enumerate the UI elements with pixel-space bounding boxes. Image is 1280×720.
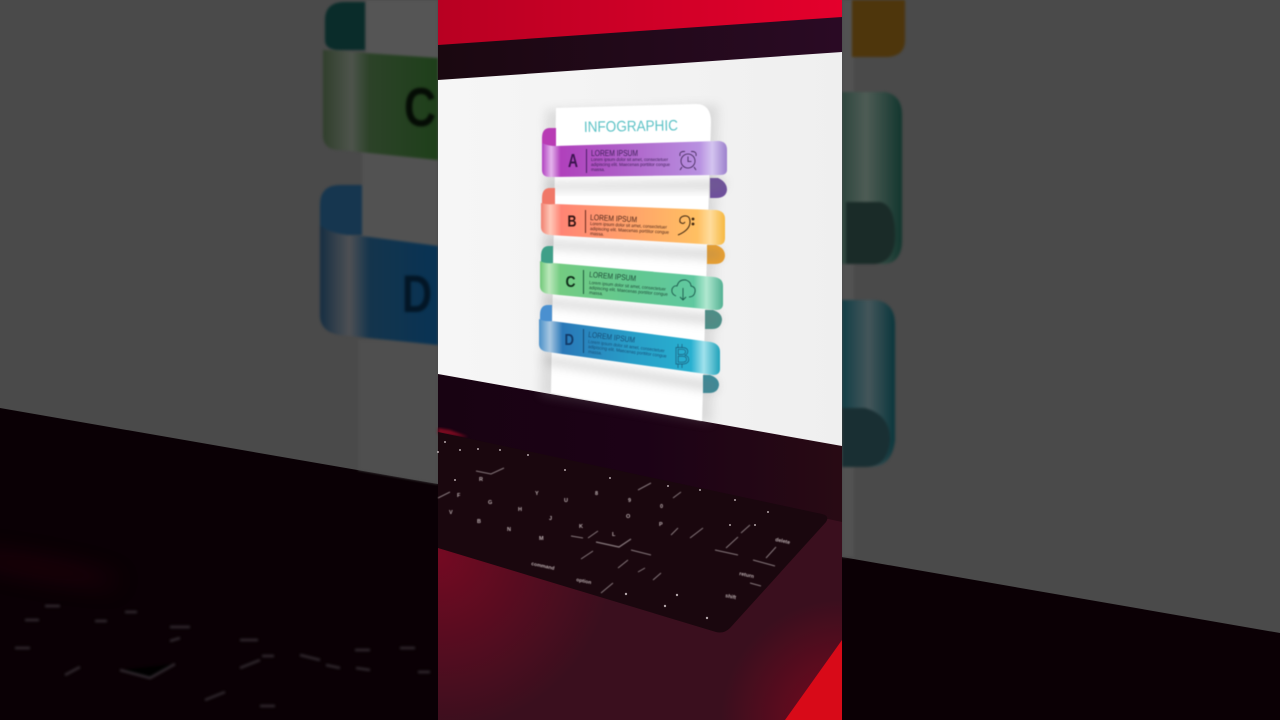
text B: massa. [590, 231, 604, 237]
paper shadow [540, 105, 718, 424]
key labels: delete [775, 537, 791, 546]
key labels: L [612, 532, 616, 538]
text C [589, 270, 668, 297]
key labels: G [488, 500, 492, 506]
text C: LOREM IPSUM [589, 270, 637, 283]
key labels: K [579, 524, 583, 530]
key labels: 0 [660, 504, 663, 510]
infographic [539, 104, 727, 424]
text D [588, 330, 667, 359]
text B: Lorem ipsum dolor sit amet, consectetuer [590, 221, 668, 230]
key labels: Y [535, 491, 539, 497]
key labels: N [507, 527, 511, 533]
text A [591, 149, 670, 172]
key labels: return [739, 571, 755, 580]
ribbon D [539, 305, 720, 393]
title: INFOGRAPHIC [584, 117, 678, 136]
text D: LOREM IPSUM [588, 330, 636, 345]
laptop lid top, red background [438, 0, 842, 60]
icon: bitcoin: B [674, 343, 690, 370]
key labels: P [659, 522, 663, 528]
text A: massa. [591, 167, 605, 172]
blurred letter C: C [404, 76, 436, 138]
letter B: B [568, 214, 576, 230]
text B [590, 213, 670, 237]
text D: adipiscing elit. Maecenas porttitor congue [588, 344, 667, 359]
text C: adipiscing elit. Maecenas porttitor congue [589, 285, 668, 297]
letter C: C [566, 274, 576, 291]
key labels: H [518, 507, 522, 513]
key labels: J [549, 516, 552, 522]
text D: massa. [588, 349, 602, 356]
key labels: B [477, 519, 481, 525]
key labels: M [539, 536, 544, 542]
right blurred side panel [842, 0, 1280, 720]
text C: Lorem ipsum dolor sit amet, consectetuer [589, 280, 666, 292]
text B: adipiscing elit. Maecenas porttitor congue [590, 226, 670, 235]
key labels: F [457, 493, 461, 499]
blurred letter D: D [402, 265, 432, 324]
key labels: O [626, 514, 631, 520]
ribbon C [540, 246, 723, 329]
letter D: D [564, 332, 574, 349]
key labels: U [564, 498, 568, 504]
keyboard [437, 432, 827, 632]
paper sheet [551, 104, 711, 421]
left blurred side panel [0, 0, 438, 720]
icon: alarm clock [680, 151, 696, 170]
letter A: A [568, 151, 578, 171]
ribbon B [541, 188, 725, 264]
laptop bezel [438, 17, 842, 90]
key labels: V [449, 510, 453, 516]
text A: adipiscing elit. Maecenas porttitor congue [591, 162, 670, 167]
key labels: 8 [595, 491, 598, 497]
text D: Lorem ipsum dolor sit amet, consectetuer [588, 339, 665, 353]
key labels: shift [725, 593, 737, 601]
icon: cloud download [672, 280, 695, 300]
text A: LOREM IPSUM [591, 149, 638, 158]
text C: massa. [589, 290, 603, 296]
key labels: 9 [628, 498, 631, 504]
ribbon A [542, 128, 727, 198]
key labels: option [576, 577, 592, 586]
key labels [449, 477, 791, 601]
key labels: command [531, 561, 555, 572]
laptop deck [438, 370, 842, 720]
laptop screen [438, 52, 842, 446]
text B: LOREM IPSUM [590, 213, 638, 224]
key labels: R [479, 477, 483, 483]
icon: bass clef [678, 216, 694, 235]
key edge highlights [438, 468, 776, 593]
text A: Lorem ipsum dolor sit amet, consectetuer [591, 157, 668, 162]
